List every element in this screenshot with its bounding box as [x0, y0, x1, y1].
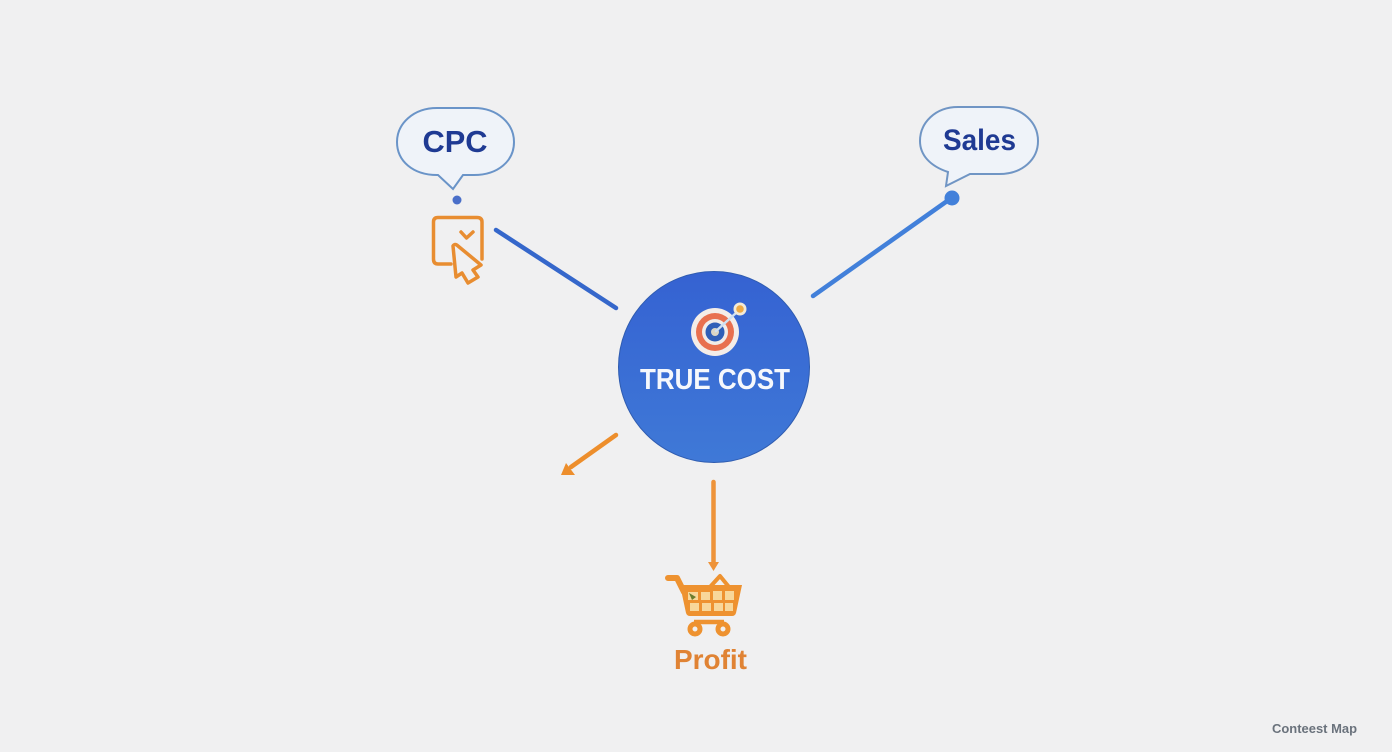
icon: target with dart: [691, 302, 746, 356]
connector line: CPC to true cost: [496, 230, 616, 308]
connector dot: CPC: [452, 196, 462, 204]
arrow: orange diagonal: [561, 435, 616, 475]
label: TRUE COST: TRUE COST: [640, 364, 790, 396]
label: Profit: Profit: [674, 644, 747, 675]
icon: orange click cursor on box: [434, 218, 482, 283]
label: Sales: Sales: [943, 124, 1016, 157]
cart windows: [688, 591, 734, 611]
arrow: orange down to cart: [708, 482, 719, 571]
label: CPC: CPC: [422, 124, 488, 159]
icon: shopping cart: [668, 576, 742, 634]
connector line: Sales to true cost: [813, 190, 960, 296]
label: map caption: Conteest Map: [1272, 722, 1357, 736]
callout: Sales speech bubble: [920, 107, 1038, 186]
panel: central true cost circle: [618, 272, 810, 462]
callout: CPC speech bubble: [397, 108, 514, 189]
